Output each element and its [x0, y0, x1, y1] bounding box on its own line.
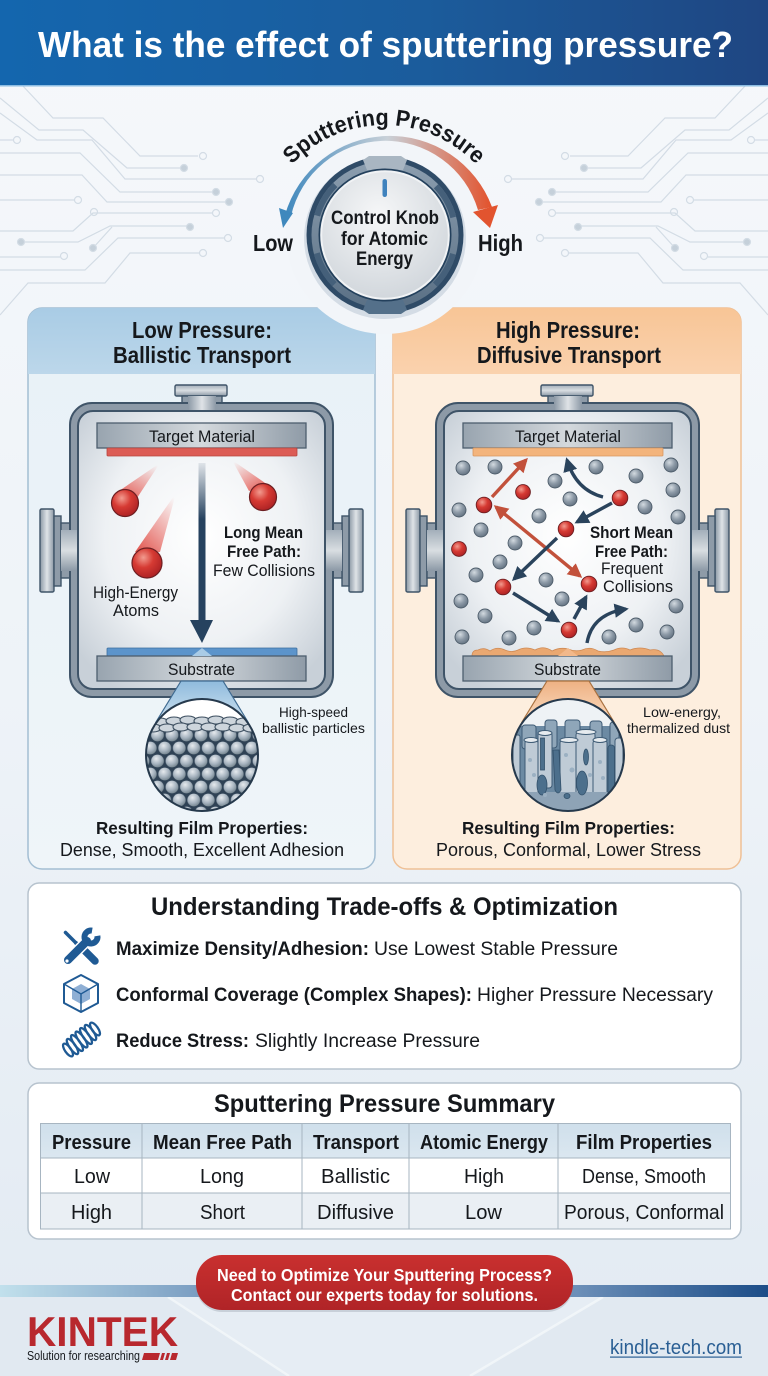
table header row: Film Properties: [576, 1132, 712, 1154]
atom trails: [116, 460, 268, 552]
target label: Target Material: [515, 427, 621, 446]
arrow: mean free path: [190, 463, 213, 643]
chamber: low pressure: [40, 385, 363, 697]
website link: kindle-tech.com: [610, 1337, 742, 1359]
label: short mean free path: Free Path:: [595, 542, 668, 561]
low pressure film properties: [60, 818, 344, 860]
table header row: [52, 1132, 712, 1154]
caption: low-energy: thermalized dust: [627, 720, 730, 736]
label: short mean free path: Collisions: [603, 577, 673, 596]
table row: high: Short: [200, 1202, 245, 1224]
porous film on substrate: [472, 648, 664, 656]
energetic atoms: [452, 485, 628, 638]
item: conformal coverage: Higher Pressure Necessary: [477, 985, 714, 1006]
label: short mean free path: Short Mean: [590, 523, 673, 542]
substrate plate: [97, 656, 306, 681]
label: long mean free path: Few Collisions: [213, 561, 315, 580]
substrate plate: [463, 656, 672, 681]
substrate label: Substrate: [534, 660, 601, 679]
table header row: Mean Free Path: [153, 1132, 292, 1154]
table header row: Transport: [313, 1132, 399, 1154]
high pressure film properties: Porous, Conformal, Lower Stress: [436, 840, 701, 860]
circuit pattern left: [0, 85, 264, 315]
logo: KINTEK: Solution for researching: [27, 1348, 140, 1363]
heading: high pressure: Diffusive Transport: [477, 342, 661, 368]
low pressure film properties: Dense, Smooth, Excellent Adhesion: [60, 840, 344, 860]
pressure arc arrow: [279, 136, 498, 228]
heading: high pressure: [477, 317, 661, 368]
high energy atoms: [112, 484, 276, 578]
heading: low pressure: [113, 317, 291, 368]
call to action pill: [196, 1255, 573, 1312]
arc label: Sputtering Pressure: [284, 110, 482, 162]
call to action pill: Contact our experts today for solutions.: [231, 1285, 538, 1305]
panel: trade-offs: [28, 883, 741, 1069]
magnified view: dense film: [145, 698, 259, 812]
caption: low-energy: Low-energy,: [643, 704, 721, 720]
label: long mean free path: [213, 523, 315, 580]
table row: high: Diffusive: [317, 1202, 394, 1224]
footer background: [0, 1285, 768, 1376]
title banner: [0, 0, 768, 86]
magnifier cone low: [156, 648, 248, 722]
collision arrows: [492, 460, 626, 643]
label: high: High: [478, 230, 523, 256]
magnifier cone high: [522, 648, 614, 722]
summary heading: Sputtering Pressure Summary: [214, 1090, 555, 1118]
substrate label: Substrate: [168, 660, 235, 679]
control knob: [304, 156, 466, 319]
red target film: [107, 448, 297, 456]
table row: low: Dense, Smooth: [582, 1166, 706, 1188]
target label: Target Material: [149, 427, 255, 446]
footer band: [0, 1285, 768, 1297]
label: long mean free path: Long Mean: [224, 523, 303, 542]
knob label: Energy: [356, 249, 413, 270]
item: reduce stress: Reduce Stress:: [116, 1031, 249, 1052]
knob indicator: [382, 179, 387, 197]
high pressure film properties: [436, 818, 701, 860]
caption: low-energy: [627, 704, 730, 736]
label: high-energy atoms: [93, 583, 178, 620]
low pressure film properties: Resulting Film Properties:: [96, 818, 308, 838]
label: long mean free path: Free Path:: [227, 542, 301, 561]
knob label: for Atomic: [341, 229, 428, 250]
table row: low: Ballistic: [321, 1166, 390, 1188]
item: reduce stress: Slightly Increase Pressure: [255, 1031, 480, 1052]
high pressure film properties: Resulting Film Properties:: [462, 818, 675, 838]
label: short mean free path: Frequent: [601, 559, 663, 578]
label: short mean free path: [590, 523, 673, 596]
table row: high: Porous, Conformal: [564, 1202, 724, 1224]
icon: wrench: [65, 931, 97, 963]
knob label: Control Knob: [331, 208, 439, 229]
table row: high: High: [71, 1202, 112, 1224]
logo: KINTEK: KINTEK: [27, 1308, 178, 1355]
table row: high: [71, 1202, 724, 1224]
icon: cube: [64, 975, 98, 1012]
knob halo: [286, 136, 484, 334]
table header row: Atomic Energy: [420, 1132, 549, 1154]
label: high-energy atoms: Atoms: [113, 601, 159, 620]
summary table: [40, 1123, 730, 1229]
label: low: Low: [253, 230, 293, 256]
item: maximize density: [116, 939, 618, 960]
item: maximize density: Maximize Density/Adhesion:: [116, 939, 369, 960]
item: conformal coverage: Conformal Coverage (Complex Shapes):: [116, 985, 472, 1006]
panel: low pressure: [28, 308, 375, 869]
icon: spring: [61, 1021, 102, 1058]
panel: summary: [28, 1083, 741, 1239]
table row: low: High: [464, 1166, 504, 1188]
item: conformal coverage: [116, 985, 714, 1006]
table row: low: Low: [74, 1166, 111, 1188]
item: maximize density: Use Lowest Stable Pressure: [374, 939, 618, 960]
table header row: Pressure: [52, 1132, 131, 1154]
dense film on substrate: [107, 648, 297, 656]
label: high-energy atoms: High-Energy: [93, 583, 178, 602]
knob label: [331, 208, 439, 270]
table row: low: [74, 1166, 706, 1188]
caption: high-speed: [262, 704, 365, 736]
gas atoms: [452, 458, 685, 645]
title: What is the effect of sputtering pressure?: [38, 24, 733, 65]
magnified view: porous columns: [510, 699, 626, 816]
circuit pattern right: [504, 85, 768, 315]
trade-offs heading: Understanding Trade-offs & Optimization: [151, 893, 618, 921]
table row: high: Low: [465, 1202, 503, 1224]
item: reduce stress: [116, 1031, 480, 1052]
heading: high pressure: High Pressure:: [496, 317, 640, 343]
orange target film: [473, 448, 663, 456]
caption: high-speed: High-speed: [279, 704, 348, 720]
call to action pill: Need to Optimize Your Sputtering Process?: [217, 1265, 552, 1285]
table row: low: Long: [200, 1166, 244, 1188]
chamber: high pressure: [406, 385, 729, 697]
heading: low pressure: Ballistic Transport: [113, 342, 291, 368]
caption: high-speed: ballistic particles: [262, 720, 365, 736]
panel: high pressure: [393, 308, 741, 869]
heading: low pressure: Low Pressure:: [132, 317, 272, 343]
